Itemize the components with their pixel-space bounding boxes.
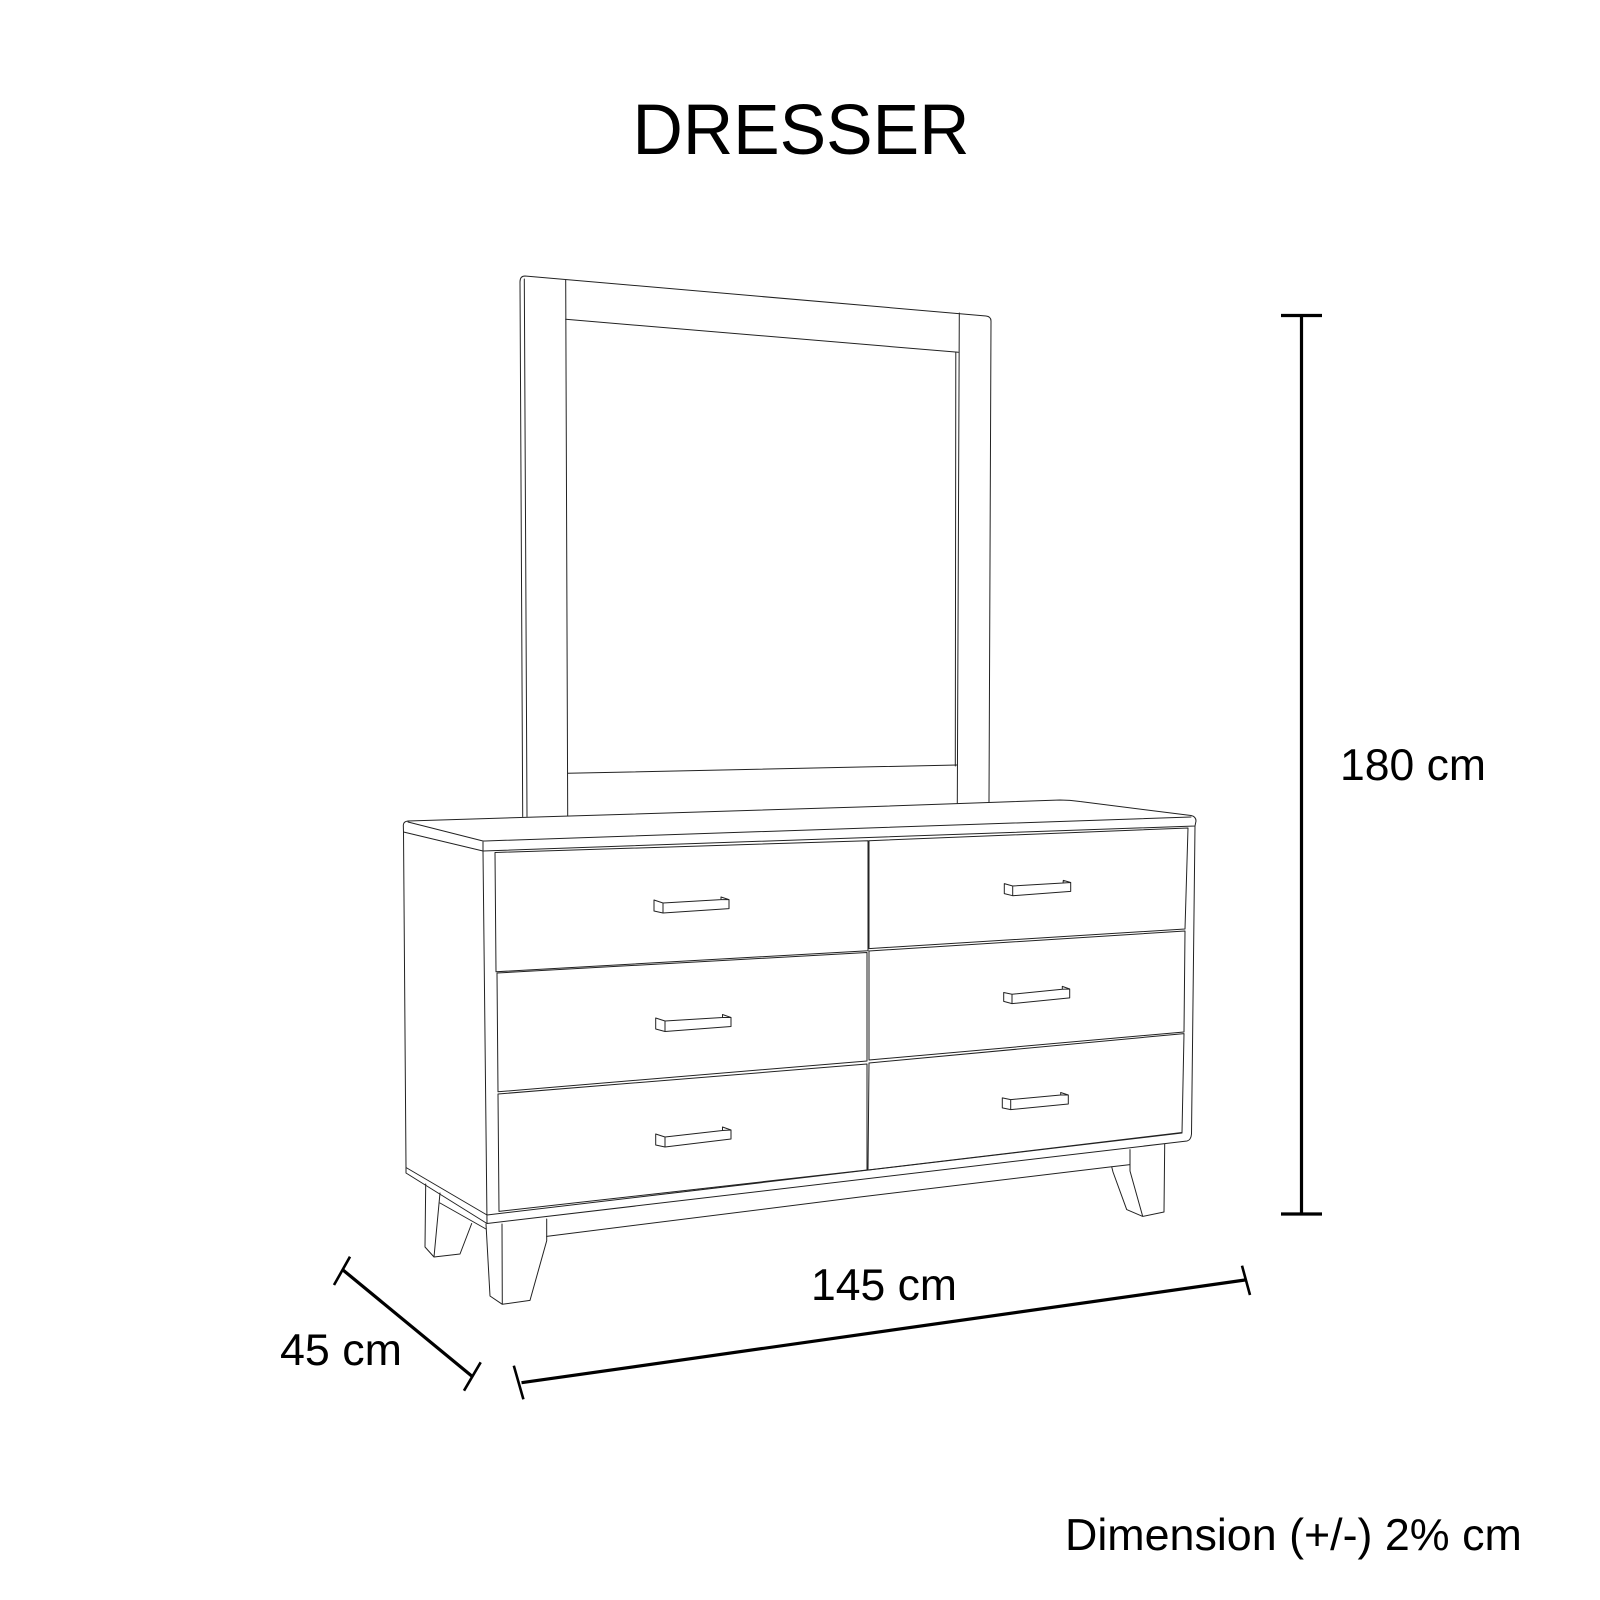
dresser top bbox=[403, 800, 1196, 851]
dimension: depth 45 cm bbox=[280, 1257, 481, 1391]
drawer: left middle bbox=[497, 952, 867, 1092]
drawer: right middle bbox=[869, 931, 1185, 1060]
dimension: width 145 cm: 145 cm bbox=[811, 1261, 957, 1310]
dimension: height 180 cm bbox=[1281, 316, 1486, 1214]
leg: front left bbox=[486, 1219, 547, 1304]
drawer: left bottom bbox=[498, 1064, 867, 1211]
drawer: right top bbox=[869, 828, 1188, 949]
handle: right bottom bbox=[1002, 1092, 1068, 1110]
handle: right top bbox=[1004, 880, 1071, 896]
drawer: right bottom bbox=[868, 1034, 1184, 1170]
handle: left bottom bbox=[656, 1127, 731, 1147]
handle: left middle bbox=[656, 1014, 731, 1032]
dresser body bbox=[403, 800, 1196, 1304]
side and frame bbox=[404, 826, 1195, 1224]
leg: back left bbox=[425, 1184, 486, 1257]
drawer: left top bbox=[495, 841, 868, 972]
tolerance note: Dimension (+/-) 2% cm bbox=[1065, 1510, 1522, 1560]
dimension: width 145 cm bbox=[514, 1261, 1250, 1399]
leg: front right bbox=[1112, 1144, 1165, 1216]
handle: right middle bbox=[1004, 986, 1070, 1004]
lower apron bbox=[547, 1165, 1130, 1236]
handle: left top bbox=[654, 897, 729, 913]
mirror bbox=[520, 276, 991, 816]
dimension: height 180 cm: 180 cm bbox=[1340, 741, 1486, 790]
dimension: depth 45 cm: 45 cm bbox=[280, 1325, 402, 1375]
title: DRESSER bbox=[632, 91, 970, 170]
